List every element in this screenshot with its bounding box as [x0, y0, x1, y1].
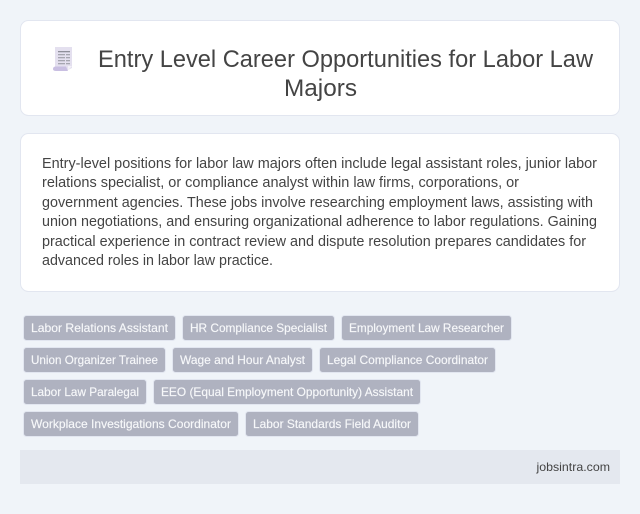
tag: EEO Assistant [154, 380, 420, 404]
tag: Labor Law Paralegal [24, 380, 146, 404]
tag: Workplace Investigations Coordinator [24, 412, 238, 436]
tag: Workplace Investigations Coordinator: Workplace Investigations Coordinator [31, 417, 231, 431]
tags: related job titles [24, 316, 512, 436]
tag: Labor Standards Field Auditor: Labor Standards Field Auditor [253, 417, 411, 431]
text block: description: advanced roles in labor law practice. [42, 253, 273, 269]
footer bar [20, 450, 620, 484]
tag: Labor Relations Assistant: Labor Relations Assistant [31, 321, 169, 335]
tag: Wage and Hour Analyst [172, 348, 312, 372]
tag: Labor Standards Field Auditor [246, 412, 418, 436]
tag: Employment Law Researcher [342, 316, 512, 340]
title: Entry Level Career Opportunities for Labor Law [98, 46, 594, 73]
tag: Union Organizer Trainee [24, 348, 166, 372]
tag: Employment Law Researcher: Employment Law Researcher [349, 321, 504, 335]
title [98, 46, 594, 102]
footer source text: jobsintra.com [535, 460, 610, 474]
tag: HR Compliance Specialist: HR Compliance Specialist [190, 321, 328, 335]
panel: description card [20, 134, 620, 292]
text block: description: relations specialist, or compliance analyst within law firms, corporations, or [42, 175, 519, 191]
text block: description: practical experience in contract review and dispute resolution prepares candidates for [42, 234, 586, 250]
title: Majors [284, 75, 357, 102]
tag: Legal Compliance Coordinator: Legal Compliance Coordinator [327, 353, 488, 367]
text block: description: Entry-level positions for labor law majors often include legal assistant roles, junior labor [42, 156, 597, 172]
text block: description: government agencies. These jobs involve researching employment laws, assisting with [42, 195, 593, 211]
icon: document scroll [53, 47, 72, 71]
tag: Labor Law Paralegal: Labor Law Paralegal [31, 385, 139, 399]
tag: EEO Assistant: EEO (Equal Employment Opportunity) Assistant [161, 385, 414, 399]
panel: title card [20, 20, 620, 116]
text block: description: union negotiations, and ensuring organizational adherence to labor regulations. Gaining [42, 214, 597, 230]
tag: Wage and Hour Analyst: Wage and Hour Analyst [180, 353, 306, 367]
text block: description [42, 156, 597, 269]
tag: Union Organizer Trainee: Union Organizer Trainee [31, 353, 158, 367]
tag: Labor Relations Assistant [24, 316, 176, 340]
tag: Legal Compliance Coordinator [320, 348, 496, 372]
tag: HR Compliance Specialist [182, 316, 334, 340]
